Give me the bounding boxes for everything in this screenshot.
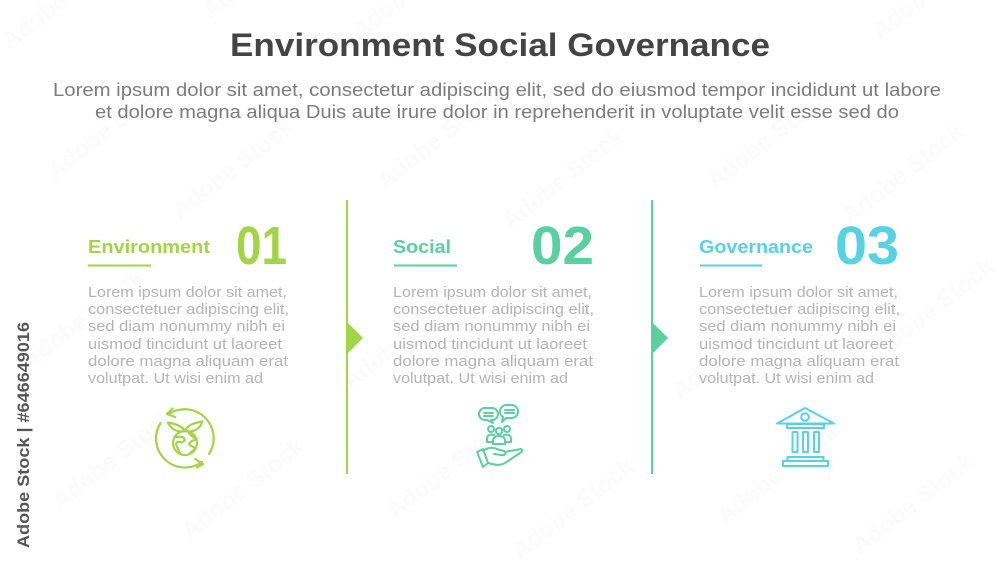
text: Adobe Stock <box>507 453 640 563</box>
text block: social: uismod tincidunt ut laoreet <box>393 337 587 353</box>
divider arrow 2 <box>651 200 668 474</box>
number 03: 03 <box>835 216 899 276</box>
heading: social: Social <box>393 237 451 257</box>
text block: environment: dolore magna aliquam erat <box>88 354 288 370</box>
number 02: 02 <box>531 216 594 276</box>
underline: social <box>394 264 457 266</box>
text block: social: consectetuer adipiscing elit, <box>393 302 594 318</box>
icon: globe with leaves and recycling arrows <box>156 408 214 468</box>
text: Adobe Stock <box>42 73 175 185</box>
heading: environment: Environment <box>88 237 210 257</box>
text block: governance: dolore magna aliquam erat <box>699 354 899 370</box>
divider arrow 1 <box>346 200 363 474</box>
intro paragraph <box>53 80 941 122</box>
text block: governance: volutpat. Ut wisi enim ad <box>699 371 874 387</box>
panel: environment <box>88 216 289 468</box>
text: Adobe Stock <box>177 433 310 545</box>
text block: environment: sed diam nonummy nibh ei <box>88 319 285 335</box>
text block: environment: uismod tincidunt ut laoreet <box>88 337 282 353</box>
heading: governance: Governance <box>699 237 813 257</box>
text block: social: dolore magna aliquam erat <box>393 354 593 370</box>
icon: speech bubbles, people and open hand <box>477 405 522 467</box>
stock credit: Adobe Stock | #646649016 <box>14 322 33 548</box>
text block: social: sed diam nonummy nibh ei <box>393 319 590 335</box>
text: Adobe Stock <box>712 418 845 530</box>
intro paragraph: Lorem ipsum dolor sit amet, consectetur adipiscing elit, sed do eiusmod tempor incididunt ut labore <box>53 80 941 100</box>
text: Adobe Stock <box>497 123 630 235</box>
text: Adobe Stock <box>867 253 1000 365</box>
text: Adobe Stock <box>167 113 300 225</box>
text block: environment: consectetuer adipiscing elit, <box>88 302 289 318</box>
text block: governance: uismod tincidunt ut laoreet <box>699 337 893 353</box>
text block: governance: Lorem ipsum dolor sit amet, <box>699 285 898 301</box>
text block: social <box>393 285 594 387</box>
text: Adobe Stock <box>667 293 800 405</box>
panel: governance <box>699 216 900 466</box>
icon: classical bank building <box>777 408 834 466</box>
underline: environment <box>88 264 151 266</box>
title: Environment Social Governance <box>230 27 770 63</box>
text block: social: Lorem ipsum dolor sit amet, <box>393 285 592 301</box>
text block: governance: sed diam nonummy nibh ei <box>699 319 896 335</box>
underline: governance <box>700 264 762 266</box>
text: Adobe Stock <box>837 118 970 230</box>
intro paragraph: et dolore magna aliqua Duis aute irure dolor in reprehenderit in voluptate velit esse sed do <box>95 102 899 122</box>
text: Adobe Stock <box>47 403 180 515</box>
text: Adobe Stock <box>702 83 835 195</box>
text: Adobe Stock <box>382 413 515 525</box>
text block: social: volutpat. Ut wisi enim ad <box>393 371 568 387</box>
panel: social <box>393 216 594 467</box>
text block: environment <box>88 285 289 387</box>
text: Adobe Stock <box>372 83 505 195</box>
text block: governance <box>699 285 900 387</box>
number 01: 01 <box>236 216 287 276</box>
text block: governance: consectetuer adipiscing elit, <box>699 302 900 318</box>
text block: environment: Lorem ipsum dolor sit amet, <box>88 285 287 301</box>
text: Adobe Stock <box>17 263 150 375</box>
text block: environment: volutpat. Ut wisi enim ad <box>88 371 263 387</box>
text: Adobe Stock <box>847 448 980 560</box>
text: Adobe Stock <box>337 283 470 395</box>
